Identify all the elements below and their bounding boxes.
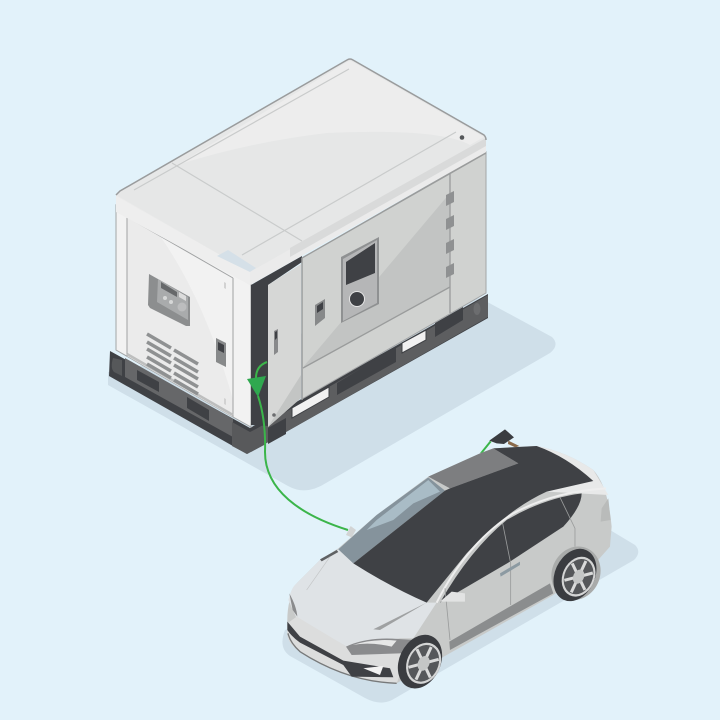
roof bolt [460, 135, 464, 140]
control display [341, 237, 379, 323]
generator ground shadow [108, 298, 556, 490]
side windows [440, 493, 582, 603]
pallet slots left [137, 370, 159, 392]
right face [302, 152, 486, 400]
charge port [346, 526, 356, 537]
car body [287, 446, 612, 683]
roof lid [116, 59, 486, 285]
lower grille [287, 622, 393, 677]
left face [116, 205, 251, 427]
rear body light [537, 446, 608, 495]
dark door opening [251, 256, 302, 426]
side skirt [449, 583, 553, 650]
pallet base [109, 294, 488, 454]
vents [147, 334, 198, 394]
windshield [338, 477, 445, 563]
white slot 2 [402, 330, 426, 353]
hinges [446, 191, 454, 278]
open door [268, 264, 301, 427]
rear wheel [545, 542, 605, 608]
side indicator [289, 593, 297, 617]
white slot 1 [292, 387, 329, 418]
windshield highlight [367, 480, 440, 530]
charging cable [256, 362, 348, 530]
pallet slots right [268, 307, 463, 444]
left mirror [320, 550, 338, 561]
car ground shadow [282, 530, 638, 703]
fender crease [307, 557, 330, 590]
sunroof [428, 448, 518, 488]
door handle [500, 562, 520, 577]
wing mirror [440, 592, 465, 602]
corner foot [474, 303, 480, 315]
front bumper [287, 617, 413, 683]
headlight [346, 639, 415, 655]
front wheel [389, 628, 451, 696]
panel latch [315, 299, 325, 326]
pallet corner block [232, 422, 266, 454]
rear shading [601, 498, 611, 522]
generator unit [109, 59, 488, 454]
hood [288, 549, 437, 647]
arrow head [247, 376, 266, 397]
small screws [224, 282, 226, 405]
hood crease [373, 603, 427, 630]
control panel [148, 274, 190, 326]
door lines [445, 497, 575, 640]
car connector on roof [481, 429, 519, 453]
roof and hood glass [353, 446, 593, 603]
roof rail [437, 488, 606, 603]
electric car [287, 429, 612, 696]
rear wheel arch [543, 538, 609, 608]
bumper lower edge [288, 633, 397, 683]
side latch [216, 338, 226, 367]
